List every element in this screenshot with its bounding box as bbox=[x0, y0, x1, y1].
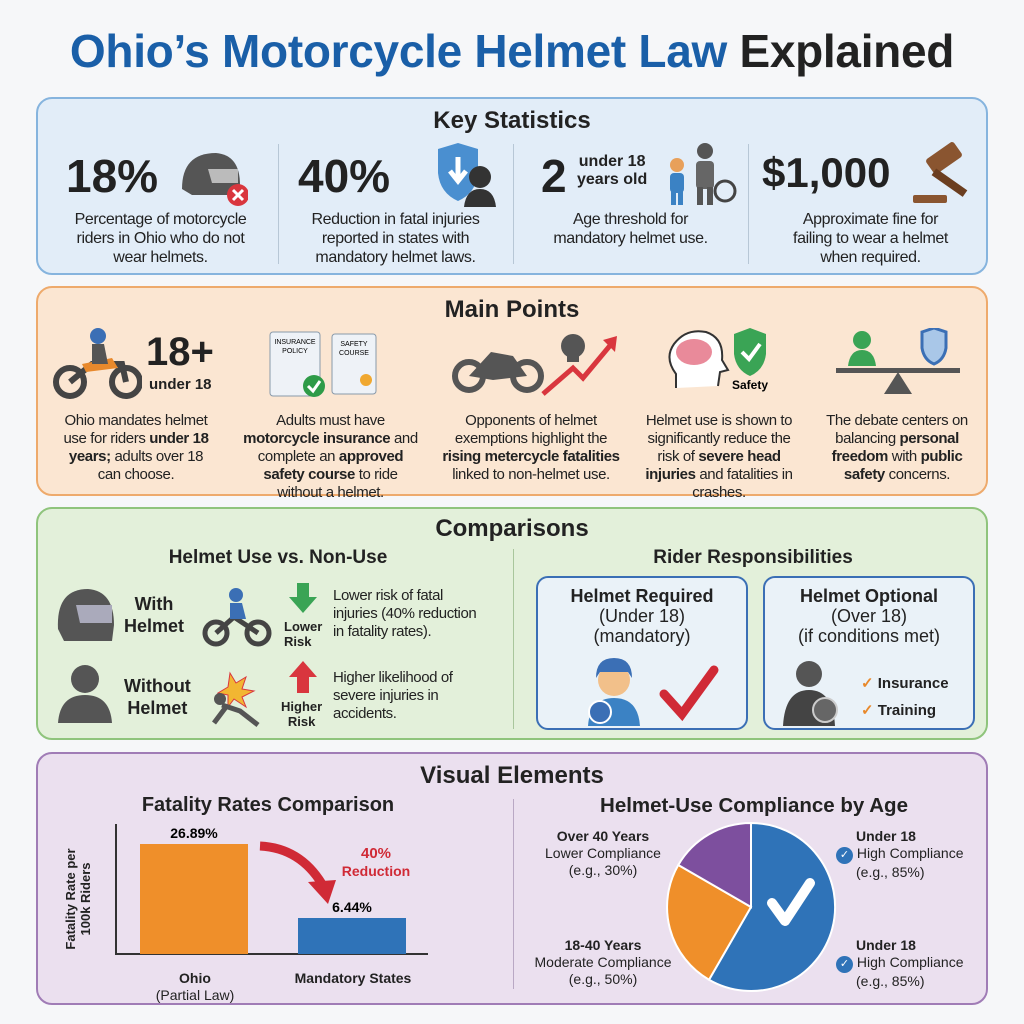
point 5 bbox=[826, 328, 968, 483]
point 4: Helmet use is shown to bbox=[646, 412, 792, 429]
icon: helmet with x bbox=[182, 153, 248, 206]
pie chart: compliance by age: (e.g., 85%) bbox=[856, 973, 924, 989]
row: with helmet: in fatality rates). bbox=[333, 623, 431, 640]
icon: insurance and course documents: COURSE bbox=[339, 350, 369, 357]
pie chart: compliance by age: Under 18 bbox=[856, 828, 916, 844]
card: helmet required: (mandatory) bbox=[593, 626, 691, 646]
point 5: The debate centers on bbox=[826, 412, 968, 429]
stat 2 under 18: years old bbox=[577, 171, 647, 188]
point 1 bbox=[53, 328, 214, 483]
point 1: 18+ bbox=[146, 330, 214, 374]
icon: child and adult bbox=[670, 143, 736, 205]
card: helmet required bbox=[536, 576, 748, 730]
row: with helmet: With bbox=[135, 594, 173, 614]
icon: motorcycle rider bbox=[53, 328, 142, 399]
row: with helmet: injuries (40% reduction bbox=[333, 605, 476, 622]
point 3 bbox=[442, 334, 620, 483]
stat 2 under 18: 2 bbox=[541, 150, 567, 202]
stat 18% bbox=[66, 150, 248, 266]
point 2: Adults must have bbox=[276, 412, 385, 429]
row: without helmet: Without bbox=[124, 676, 191, 696]
icon: insurance and course documents: POLICY bbox=[282, 348, 308, 355]
bar chart: fatality rates: 40% bbox=[361, 845, 391, 862]
row: without helmet: severe injuries in bbox=[333, 687, 438, 704]
icon: insurance and course documents bbox=[270, 332, 376, 397]
panel: visual elements: Visual Elements bbox=[420, 762, 604, 789]
point 3: rising metercycle fatalities bbox=[442, 448, 620, 465]
stat $1,000 bbox=[762, 142, 968, 266]
bar chart: fatality rates bbox=[63, 794, 428, 1003]
icon: insurance and course documents: SAFETY bbox=[340, 341, 368, 348]
pie chart: compliance by age: ✓ bbox=[840, 849, 849, 861]
card: helmet required: Helmet Required bbox=[570, 586, 714, 606]
pie chart: compliance by age: Lower Compliance bbox=[545, 845, 661, 861]
point 4: risk of severe head bbox=[657, 448, 781, 465]
point 3: Opponents of helmet bbox=[465, 412, 597, 429]
pie chart: compliance by age: 18-40 Years bbox=[565, 937, 641, 953]
row: with helmet: Lower risk of fatal bbox=[333, 587, 443, 604]
icon: balance scale bbox=[836, 328, 960, 394]
row: without helmet: Higher likelihood of bbox=[333, 669, 453, 686]
icon: crashed motorcycle, skull, rising arrow bbox=[452, 334, 617, 396]
stat 2 under 18: Age threshold for bbox=[573, 211, 688, 228]
pie chart: compliance by age: (e.g., 85%) bbox=[856, 864, 924, 880]
panel: comparisons: Comparisons bbox=[435, 515, 589, 542]
stat 40% bbox=[298, 143, 496, 266]
bar chart: fatality rates: Mandatory States bbox=[295, 970, 411, 986]
card: helmet optional: (Over 18) bbox=[831, 606, 907, 626]
row: with helmet: Lower bbox=[284, 619, 322, 634]
icon: head with brain and shield bbox=[668, 328, 768, 392]
stat $1,000: when required. bbox=[820, 249, 921, 266]
bar chart: fatality rates: 6.44% bbox=[332, 899, 372, 915]
bar chart: fatality rates: Reduction bbox=[342, 863, 410, 879]
pie chart: compliance by age: ✓ bbox=[840, 958, 849, 970]
point 2: motorcycle insurance and bbox=[243, 430, 418, 447]
stat 40%: mandatory helmet laws. bbox=[315, 249, 476, 266]
stat 40%: 40% bbox=[298, 150, 390, 202]
pie chart: compliance by age: Under 18 bbox=[856, 937, 916, 953]
row: with helmet: Helmet bbox=[124, 616, 184, 636]
stat 18%: riders in Ohio who do not bbox=[77, 230, 244, 247]
stat 2 under 18: under 18 bbox=[579, 153, 645, 170]
stat $1,000: failing to wear a helmet bbox=[793, 230, 948, 247]
bar chart: fatality rates: Ohio bbox=[179, 970, 211, 986]
row: without helmet: Higher bbox=[281, 699, 322, 714]
point 5: safety concerns. bbox=[844, 466, 950, 483]
pie chart: compliance by age: (e.g., 50%) bbox=[569, 971, 637, 987]
stat 40%: Reduction in fatal injuries bbox=[312, 211, 479, 228]
stat 2 under 18: mandatory helmet use. bbox=[553, 230, 708, 247]
card: helmet optional bbox=[763, 576, 975, 730]
stat $1,000: Approximate fine for bbox=[803, 211, 938, 228]
point 5: balancing personal bbox=[835, 430, 959, 447]
panel: main points: Main Points bbox=[445, 296, 579, 323]
pie chart: compliance by age: Helmet-Use Compliance by Age bbox=[600, 794, 908, 817]
panel: visual elements bbox=[36, 752, 988, 1005]
point 3: exemptions highlight the bbox=[455, 430, 607, 447]
pie chart: compliance by age bbox=[535, 794, 964, 992]
pie chart: compliance by age: Over 40 Years bbox=[557, 828, 649, 844]
card: helmet optional: Helmet Optional bbox=[800, 586, 938, 606]
card: helmet required: (Under 18) bbox=[599, 606, 685, 626]
pie chart: compliance by age: High Compliance bbox=[857, 954, 964, 970]
row: without helmet: accidents. bbox=[333, 705, 397, 722]
point 4: injuries and fatalities in bbox=[645, 466, 793, 483]
bar chart: fatality rates: Fatality Rates Comparison bbox=[142, 794, 394, 816]
card: helmet optional: ✓ Training bbox=[861, 702, 936, 719]
panel: key statistics: Key Statistics bbox=[433, 107, 591, 134]
stat 18%: 18% bbox=[66, 150, 158, 202]
stat $1,000: $1,000 bbox=[762, 149, 890, 196]
point 5: freedom with public bbox=[832, 448, 962, 465]
bar chart: fatality rates: (Partial Law) bbox=[156, 987, 234, 1003]
row: without helmet: Risk bbox=[288, 714, 315, 729]
point 2: without a helmet. bbox=[277, 484, 384, 501]
point 2: complete an approved bbox=[258, 448, 403, 465]
point 1: years; adults over 18 bbox=[69, 448, 203, 465]
point 2 bbox=[243, 332, 418, 501]
stat 18%: wear helmets. bbox=[113, 249, 208, 266]
point 1: can choose. bbox=[98, 466, 174, 483]
title: Ohio’s Motorcycle Helmet Law Explained bbox=[70, 25, 954, 77]
panel: comparisons bbox=[36, 507, 988, 740]
point 3: linked to non-helmet use. bbox=[452, 466, 610, 483]
icon: shield and rider bbox=[438, 143, 496, 207]
row: without helmet: Helmet bbox=[127, 698, 187, 718]
subheading: helmet use vs non-use: Helmet Use vs. Non-Use bbox=[169, 547, 387, 568]
row: without helmet bbox=[58, 661, 453, 729]
point 1: under 18 bbox=[149, 376, 212, 393]
stat 40%: reported in states with bbox=[322, 230, 469, 247]
pie chart: compliance by age: (e.g., 30%) bbox=[569, 862, 637, 878]
icon: head with brain and shield: Safety bbox=[732, 378, 768, 392]
icon: gavel bbox=[913, 142, 968, 203]
panel: key statistics bbox=[36, 97, 988, 275]
point 1: Ohio mandates helmet bbox=[65, 412, 207, 429]
point 2: safety course to ride bbox=[263, 466, 398, 483]
point 1: use for riders under 18 bbox=[63, 430, 209, 447]
bar chart: fatality rates: 100k Riders bbox=[78, 862, 93, 936]
pie chart: compliance by age: Moderate Compliance bbox=[535, 954, 671, 970]
point 4: significantly reduce the bbox=[648, 430, 790, 447]
stat 2 under 18 bbox=[541, 143, 736, 247]
row: with helmet: Risk bbox=[284, 634, 311, 649]
bar chart: fatality rates: Fatality Rate per bbox=[63, 848, 78, 950]
stat 18%: Percentage of motorcycle bbox=[75, 211, 246, 228]
bar chart: fatality rates: 26.89% bbox=[170, 825, 218, 841]
icon: insurance and course documents: INSURANCE bbox=[274, 339, 316, 346]
card: helmet optional: ✓ Insurance bbox=[861, 675, 949, 692]
row: with helmet bbox=[58, 583, 476, 649]
panel: main points bbox=[36, 286, 988, 496]
point 4: crashes. bbox=[692, 484, 746, 501]
pie chart: compliance by age: High Compliance bbox=[857, 845, 964, 861]
point 4 bbox=[645, 328, 793, 501]
card: helmet optional: (if conditions met) bbox=[798, 626, 940, 646]
subheading: rider responsibilities: Rider Responsibilities bbox=[653, 547, 853, 568]
